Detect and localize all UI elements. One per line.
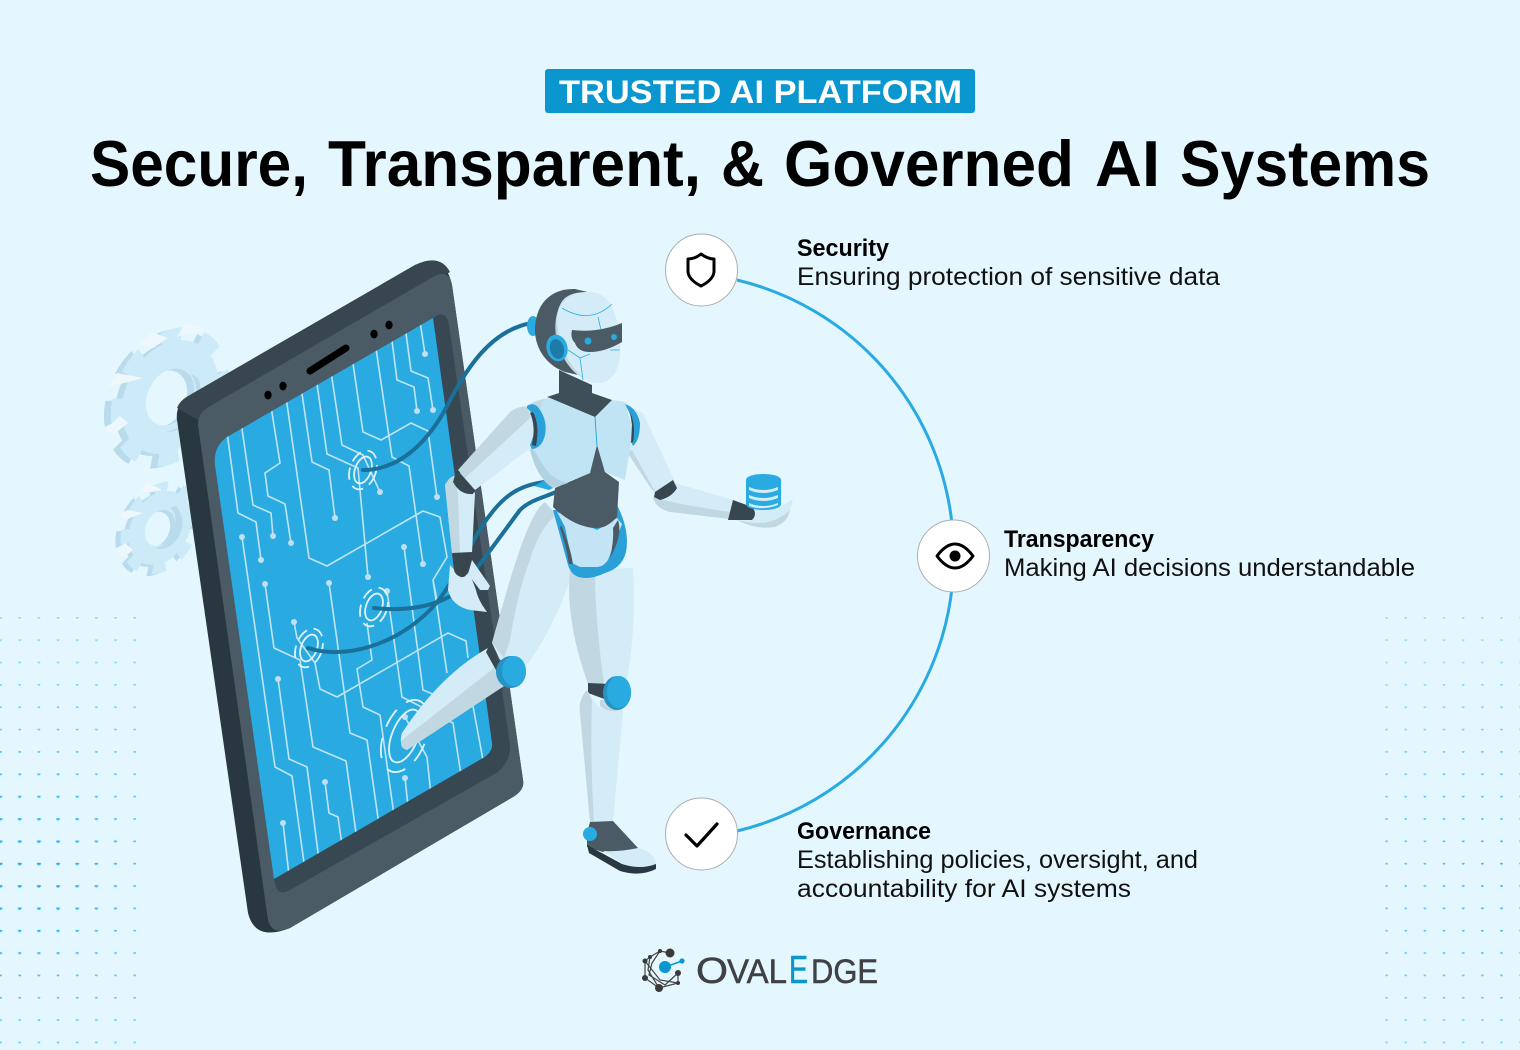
logo wordmark: E	[789, 949, 808, 992]
node: transparency icon	[918, 520, 990, 592]
dot pattern right	[1380, 610, 1520, 1050]
text: transparency	[1004, 526, 1415, 582]
icon: database	[746, 474, 781, 510]
speaker and cameras	[264, 321, 393, 399]
logo wordmark: DGE	[811, 953, 878, 991]
icon: gears	[90, 315, 243, 584]
robot neck and collar	[547, 370, 612, 417]
robot standing leg	[569, 568, 656, 874]
logo wordmark: O	[696, 950, 728, 991]
robot raised knee	[496, 656, 526, 688]
logo wordmark	[696, 949, 878, 992]
text: transparency: Transparency	[1004, 526, 1155, 553]
title: Governed	[784, 127, 1074, 200]
robot raised leg thigh	[492, 502, 572, 665]
phone screen	[215, 318, 492, 879]
text: governance: Establishing policies, oversight, and	[797, 846, 1198, 874]
connecting arc	[737, 280, 952, 831]
robot head	[527, 289, 622, 383]
title: &	[721, 127, 764, 200]
robot abdomen	[553, 446, 619, 528]
logo wordmark: VAL	[727, 953, 787, 991]
text: security: Security	[797, 235, 890, 262]
node: governance icon	[666, 798, 738, 870]
title	[90, 127, 1430, 200]
node: security icon	[666, 234, 738, 306]
touch rings	[290, 447, 439, 779]
text: security: Ensuring protection of sensitive data	[797, 263, 1220, 291]
cables	[308, 323, 556, 652]
foot	[587, 821, 638, 852]
badge: trusted AI platform: TRUSTED AI PLATFORM	[559, 74, 962, 110]
text: transparency: Making AI decisions understandable	[1004, 554, 1415, 582]
text: governance: accountability for AI systems	[797, 875, 1131, 903]
robot open hand	[728, 499, 793, 528]
robot viewer-right forearm	[653, 480, 733, 519]
robot	[401, 289, 793, 874]
robot viewer-right upper arm	[627, 408, 675, 495]
robot viewer-left arm	[445, 407, 537, 612]
phone top edge	[177, 260, 450, 420]
circuit traces	[226, 315, 483, 875]
dot pattern left	[0, 610, 140, 1050]
robot chest	[528, 398, 633, 490]
logo network icon	[642, 948, 685, 992]
robot pelvis	[553, 505, 627, 578]
text: security	[797, 235, 1220, 291]
phone inner bezel	[274, 314, 510, 892]
robot raised leg shin	[401, 646, 510, 750]
title: Transparent,	[328, 127, 701, 200]
title: Secure,	[90, 127, 308, 200]
robot shoulder joints	[527, 404, 640, 449]
phone body side	[177, 261, 523, 933]
logo: OvalEdge	[642, 948, 878, 992]
title: Systems	[1180, 127, 1430, 200]
title: AI	[1095, 127, 1160, 200]
text: governance	[797, 818, 1198, 903]
phone front face	[198, 274, 523, 931]
text: governance: Governance	[797, 818, 931, 845]
phone	[177, 260, 523, 933]
